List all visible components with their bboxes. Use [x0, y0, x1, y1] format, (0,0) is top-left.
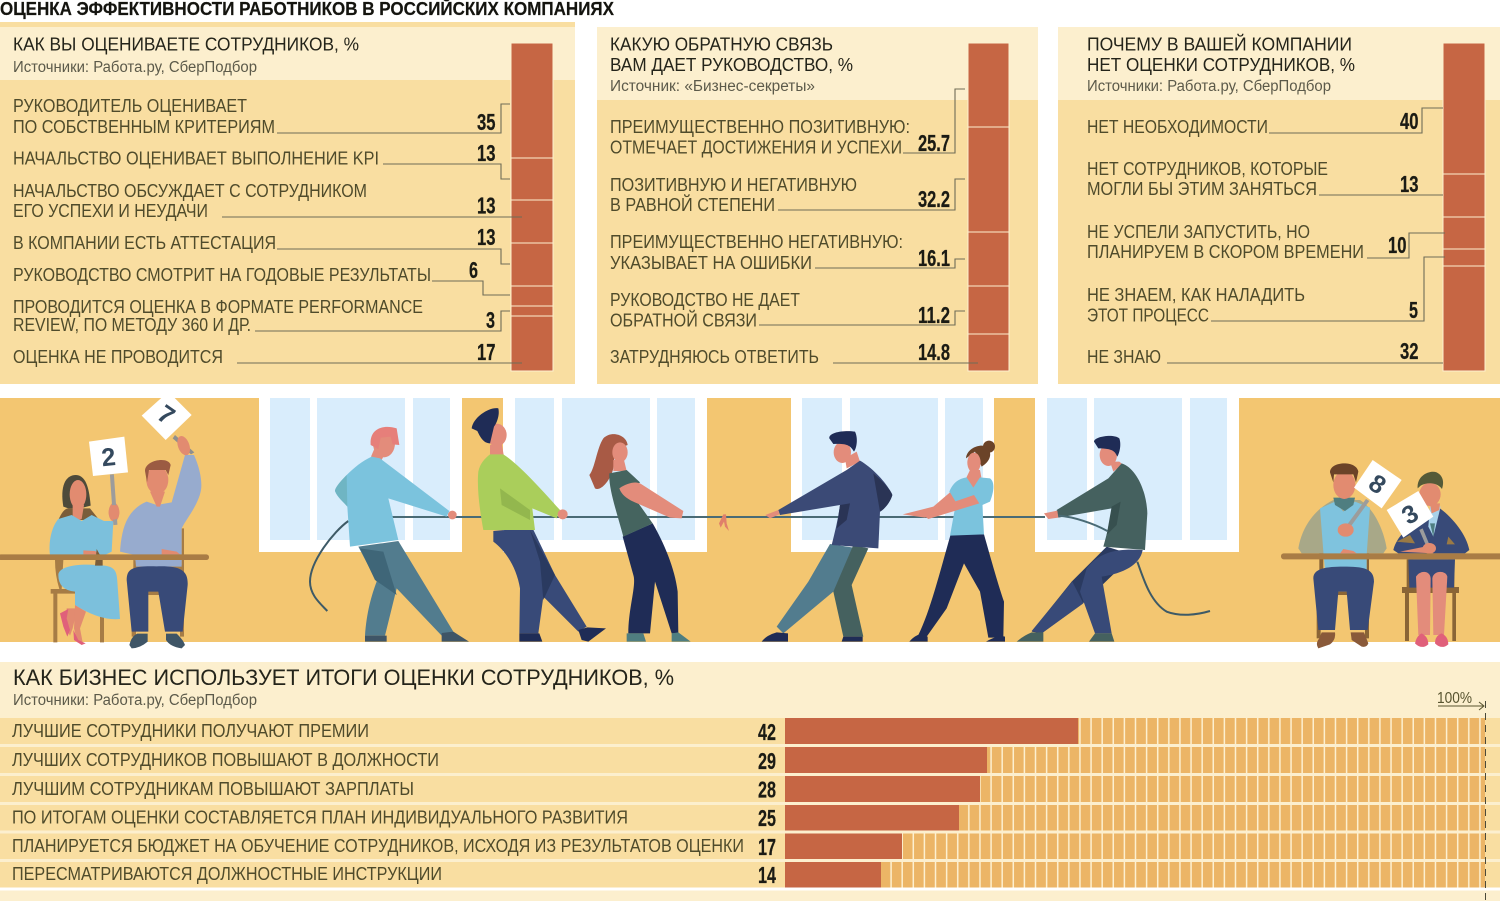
- row 11.2: [610, 290, 965, 330]
- sign 7: [142, 392, 194, 457]
- row 16.1: ПРЕИМУЩЕСТВЕННО НЕГАТИВНУЮ:: [610, 232, 903, 252]
- row 40: НЕТ НЕОБХОДИМОСТИ: [1087, 117, 1268, 137]
- heading: КАК ВЫ ОЦЕНИВАЕТЕ СОТРУДНИКОВ, %: [13, 34, 359, 54]
- row 13: [1087, 159, 1443, 199]
- row 6: [13, 257, 510, 295]
- row 10: ПЛАНИРУЕМ В СКОРОМ ВРЕМЕНИ: [1087, 242, 1364, 262]
- row 6: РУКОВОДСТВО СМОТРИТ НА ГОДОВЫЕ РЕЗУЛЬТАТЫ: [13, 265, 431, 285]
- row 17: 17: [758, 834, 776, 860]
- player: man in green sweater: [472, 408, 606, 642]
- row 11.2: ОБРАТНОЙ СВЯЗИ: [610, 310, 757, 330]
- row 40: 40: [1400, 108, 1418, 134]
- row 13 attestation: 13: [477, 224, 496, 250]
- sign 2: 2: [100, 443, 117, 472]
- row 25.7: ОТМЕЧАЕТ ДОСТИЖЕНИЯ И УСПЕХИ: [610, 138, 902, 158]
- player: man in blue sweater: [335, 427, 469, 642]
- sign 8: [1338, 460, 1402, 537]
- panel: how business uses results: [0, 662, 1500, 901]
- row 13: МОГЛИ БЫ ЭТИМ ЗАНЯТЬСЯ: [1087, 179, 1317, 199]
- rope right tail: [1137, 562, 1210, 615]
- rope left tail: [310, 521, 348, 611]
- sign 7: 7: [152, 400, 180, 431]
- 100% dashed marker: [1484, 701, 1486, 901]
- source: Источник: «Бизнес-секреты»: [610, 78, 815, 95]
- row 35: РУКОВОДИТЕЛЬ ОЦЕНИВАЕТ: [13, 96, 247, 116]
- heading: КАК БИЗНЕС ИСПОЛЬЗУЕТ ИТОГИ ОЦЕНКИ СОТРУДНИКОВ, %: [13, 665, 674, 690]
- row 32.2: 32.2: [918, 186, 950, 212]
- row 42: 42: [758, 719, 776, 745]
- row 25.7: ПРЕИМУЩЕСТВЕННО ПОЗИТИВНУЮ:: [610, 117, 910, 137]
- row 13 discussion: [13, 181, 522, 221]
- heading: ПОЧЕМУ В ВАШЕЙ КОМПАНИИ: [1087, 34, 1352, 54]
- table: [0, 554, 209, 560]
- row 35: ПО СОБСТВЕННЫМ КРИТЕРИЯМ: [13, 117, 275, 137]
- tug-of-war players right team: [762, 431, 1005, 642]
- row 13 discussion: ЕГО УСПЕХИ И НЕУДАЧИ: [13, 201, 208, 221]
- rope: [392, 516, 1045, 518]
- heading: [1087, 34, 1355, 75]
- row 5: НЕ ЗНАЕМ, КАК НАЛАДИТЬ: [1087, 285, 1305, 305]
- row 28: [0, 776, 1500, 802]
- row 32: НЕ ЗНАЮ: [1087, 347, 1161, 367]
- row 14: ПЕРЕСМАТРИВАЮТСЯ ДОЛЖНОСТНЫЕ ИНСТРУКЦИИ: [12, 864, 442, 884]
- row 17: [13, 339, 522, 367]
- row 14.8: [610, 339, 978, 367]
- row 42: ЛУЧШИЕ СОТРУДНИКИ ПОЛУЧАЮТ ПРЕМИИ: [12, 721, 369, 741]
- row 13 discussion: 13: [477, 192, 496, 218]
- rope behind the man: [1058, 516, 1107, 531]
- row 13 discussion: НАЧАЛЬСТВО ОБСУЖДАЕТ С СОТРУДНИКОМ: [13, 181, 367, 201]
- right part of the scene: [1017, 436, 1500, 648]
- 100% scale mark: 100%: [1437, 690, 1472, 707]
- stacked bar: [1443, 43, 1485, 371]
- row 29: [0, 747, 1500, 774]
- row 16.1: УКАЗЫВАЕТ НА ОШИБКИ: [610, 253, 812, 273]
- row 28: 28: [758, 776, 776, 802]
- row 17: ПЛАНИРУЕТСЯ БЮДЖЕТ НА ОБУЧЕНИЕ СОТРУДНИКОВ, ИСХОДЯ ИЗ РЕЗУЛЬТАТОВ ОЦЕНКИ: [12, 836, 744, 856]
- table: [1281, 553, 1500, 559]
- row 32: [1087, 338, 1443, 367]
- row 32: 32: [1400, 338, 1418, 364]
- row 25.7: 25.7: [918, 130, 950, 156]
- row 32.2: ПОЗИТИВНУЮ И НЕГАТИВНУЮ: [610, 175, 857, 195]
- row 16.1: [610, 232, 965, 273]
- row 13: 13: [1400, 171, 1418, 197]
- panel: why no assessment: [1058, 27, 1500, 384]
- row 25: ПО ИТОГАМ ОЦЕНКИ СОСТАВЛЯЕТСЯ ПЛАН ИНДИВИДУАЛЬНОГО РАЗВИТИЯ: [12, 808, 628, 828]
- row 5: [1087, 257, 1445, 326]
- heading: [610, 34, 853, 75]
- sign 3: 3: [1397, 499, 1424, 531]
- row 3: REVIEW, ПО МЕТОДУ 360 И ДР.: [13, 315, 251, 335]
- player: man in grey-green sweater: [1017, 436, 1147, 642]
- player: woman in blue top: [903, 441, 1005, 642]
- row 29: 29: [758, 748, 776, 774]
- row 11.2: РУКОВОДСТВО НЕ ДАЕТ: [610, 290, 800, 310]
- heading: ВАМ ДАЕТ РУКОВОДСТВО, %: [610, 55, 853, 75]
- row 25: [0, 805, 1500, 831]
- row 10: 10: [1388, 232, 1406, 258]
- sign 2: [89, 437, 128, 525]
- row 5: ЭТОТ ПРОЦЕСС: [1087, 306, 1209, 326]
- tug-of-war players left team: [310, 408, 1045, 642]
- ribbon: [719, 514, 729, 531]
- row 14: 14: [758, 862, 776, 888]
- row 13 attestation: В КОМПАНИИ ЕСТЬ АТТЕСТАЦИЯ: [13, 233, 276, 253]
- row 40: [1087, 108, 1443, 137]
- row 11.2: 11.2: [918, 302, 950, 328]
- source: Источники: Работа.ру, СберПодбор: [13, 692, 257, 709]
- row 35: [13, 96, 510, 137]
- left judges: [0, 392, 209, 648]
- row 13 KPI: НАЧАЛЬСТВО ОЦЕНИВАЕТ ВЫПОЛНЕНИЕ KPI: [13, 148, 379, 168]
- row 35: 35: [477, 109, 496, 135]
- row 10: НЕ УСПЕЛИ ЗАПУСТИТЬ, НО: [1087, 222, 1310, 242]
- source: Источники: Работа.ру, СберПодбор: [13, 59, 257, 76]
- sign 3: [1387, 491, 1436, 554]
- player: man in navy sweater: [762, 431, 892, 642]
- judge: man with sign 8: [1298, 460, 1402, 648]
- row 3: [13, 297, 510, 335]
- row 5: 5: [1409, 297, 1418, 323]
- source: Источники: Работа.ру, СберПодбор: [1087, 78, 1331, 95]
- row 42: [0, 718, 1500, 745]
- row 28: ЛУЧШИМ СОТРУДНИКАМ ПОВЫШАЮТ ЗАРПЛАТЫ: [12, 779, 414, 799]
- row 14: [0, 862, 1500, 888]
- row 17: ОЦЕНКА НЕ ПРОВОДИТСЯ: [13, 347, 223, 367]
- row 14.8: 14.8: [918, 339, 950, 365]
- row 3: 3: [486, 307, 495, 333]
- row 17: 17: [477, 339, 496, 365]
- panel: how employees are assessed: [0, 22, 575, 384]
- woman judge with sign 2: [50, 437, 128, 645]
- man judge with sign 7: [120, 392, 201, 648]
- row 32.2: [610, 175, 965, 215]
- row 13 attestation: [13, 224, 510, 264]
- panel: feedback from management: [597, 27, 1038, 384]
- stacked bar: [968, 43, 1009, 371]
- row 6: 6: [469, 257, 478, 283]
- heading: КАКУЮ ОБРАТНУЮ СВЯЗЬ: [610, 34, 833, 54]
- player: woman in teal top: [589, 434, 691, 642]
- row 29: ЛУЧШИХ СОТРУДНИКОВ ПОВЫШАЮТ В ДОЛЖНОСТИ: [12, 750, 439, 770]
- row 25.7: [610, 89, 965, 158]
- row 13 KPI: 13: [477, 140, 496, 166]
- row 3: ПРОВОДИТСЯ ОЦЕНКА В ФОРМАТЕ PERFORMANCE: [13, 297, 423, 317]
- row 25: 25: [758, 805, 776, 831]
- judge: woman with sign 3: [1387, 472, 1469, 647]
- illustration: tug of war in an office: [0, 392, 1500, 648]
- row 10: [1087, 222, 1445, 262]
- row 13: НЕТ СОТРУДНИКОВ, КОТОРЫЕ: [1087, 159, 1328, 179]
- row 32.2: В РАВНОЙ СТЕПЕНИ: [610, 194, 775, 215]
- row 17: [0, 834, 1500, 860]
- sign 8: 8: [1363, 469, 1391, 500]
- stacked bar: [511, 43, 553, 371]
- row 13 KPI: [13, 140, 510, 179]
- heading: НЕТ ОЦЕНКИ СОТРУДНИКОВ, %: [1087, 55, 1355, 75]
- windows: [259, 398, 1239, 552]
- row 14.8: ЗАТРУДНЯЮСЬ ОТВЕТИТЬ: [610, 347, 819, 367]
- row 16.1: 16.1: [918, 245, 950, 271]
